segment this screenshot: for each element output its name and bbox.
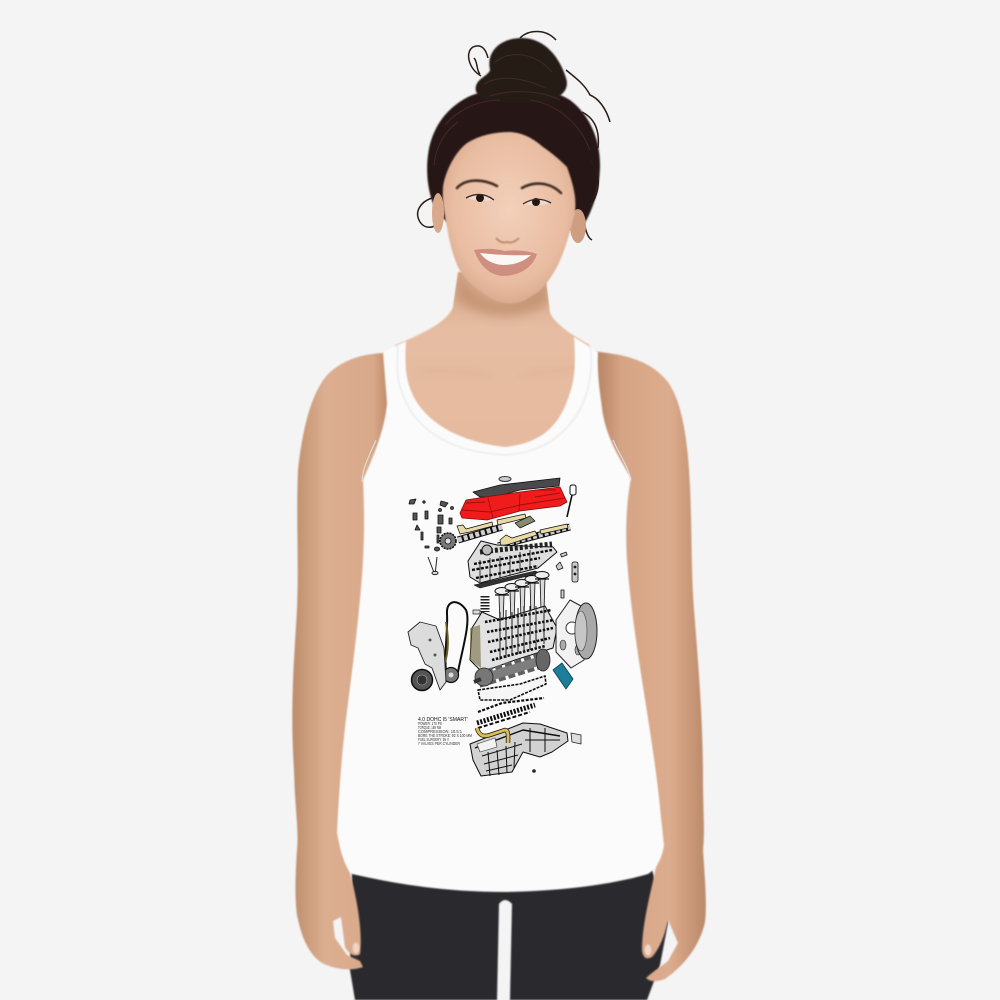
- sensor parts: [556, 552, 578, 598]
- valve springs: [480, 596, 490, 612]
- oil filter: [553, 663, 573, 689]
- pistons and rods: [495, 572, 549, 627]
- jeans: [350, 870, 668, 1000]
- hair texture: [434, 55, 590, 165]
- cam gear: [440, 533, 456, 549]
- bearing caps: [478, 676, 546, 700]
- crankshaft: [474, 649, 550, 686]
- oil pickup pipe: [477, 728, 508, 743]
- left eye: [466, 194, 494, 202]
- left thumbnail: [353, 942, 359, 954]
- timing chain: [445, 602, 467, 680]
- small block bolt: [473, 610, 480, 614]
- dipstick: [567, 485, 576, 517]
- chin shadow on neck: [456, 276, 548, 316]
- specifications text: 4.0 DOHC I5 'SMART': [418, 717, 468, 723]
- specifications text: [418, 717, 472, 746]
- right thumbnail: [645, 944, 651, 956]
- right eye: [523, 198, 551, 206]
- curly strands: [418, 32, 610, 240]
- specifications text: TORQUE: 169 NM: [418, 725, 441, 730]
- valves: [428, 557, 438, 575]
- tank top: [337, 337, 664, 892]
- nose: [496, 238, 519, 242]
- collarbone shading: [415, 368, 595, 378]
- red valve cover: [460, 487, 567, 520]
- face: [443, 132, 575, 303]
- chest centre shading: [501, 390, 509, 445]
- cover top plate: [473, 476, 560, 497]
- specifications text: POWER: 170 PS: [418, 721, 442, 726]
- model: [292, 32, 706, 1000]
- flywheel plate: [556, 600, 587, 668]
- timing cover: [408, 622, 446, 690]
- specifications text: COMPRESSION: 10.5:1: [418, 729, 462, 734]
- armhole binding right: [613, 440, 631, 480]
- specifications text: FUEL SURGERY: 95 V: [418, 737, 450, 742]
- cam caps one: [457, 514, 535, 534]
- product photo scene: [291, 30, 707, 1000]
- neckline binding: [397, 343, 591, 455]
- right eyebrow: [522, 184, 561, 193]
- oil pan: [470, 723, 568, 776]
- chain guide: [444, 622, 448, 665]
- armhole binding left: [362, 440, 376, 482]
- mouth: [474, 249, 537, 276]
- specifications text: BORE THE STROKE: 92 X 100 MM: [418, 733, 472, 738]
- flywheel disc: [575, 603, 597, 659]
- cam caps two: [500, 524, 568, 546]
- head: [418, 32, 610, 303]
- engine block: [470, 606, 557, 672]
- tank body: [337, 337, 664, 892]
- drain bolt: [532, 769, 536, 773]
- left eyebrow: [457, 181, 497, 188]
- oil pickup pipe fill: [477, 728, 508, 743]
- lower gaskets: [477, 698, 544, 728]
- hair bun: [476, 38, 567, 103]
- cylinder head: [468, 541, 557, 583]
- camshaft two: [498, 527, 570, 546]
- left ear: [432, 193, 444, 233]
- engine graphic: [408, 476, 597, 776]
- camshaft one: [458, 527, 502, 540]
- head gasket: [474, 571, 540, 588]
- right ear: [570, 209, 586, 243]
- crank pulley: [412, 670, 432, 690]
- hair back: [427, 87, 600, 230]
- right arm and hand: [585, 350, 706, 981]
- chest and neck: [395, 272, 590, 460]
- left loose hardware: [409, 499, 454, 551]
- pan bracket: [571, 733, 581, 744]
- crank sprocket: [444, 668, 458, 682]
- specifications text: 7 VALVES PER CYLINDER: [418, 741, 460, 746]
- left arm and hand: [292, 350, 400, 969]
